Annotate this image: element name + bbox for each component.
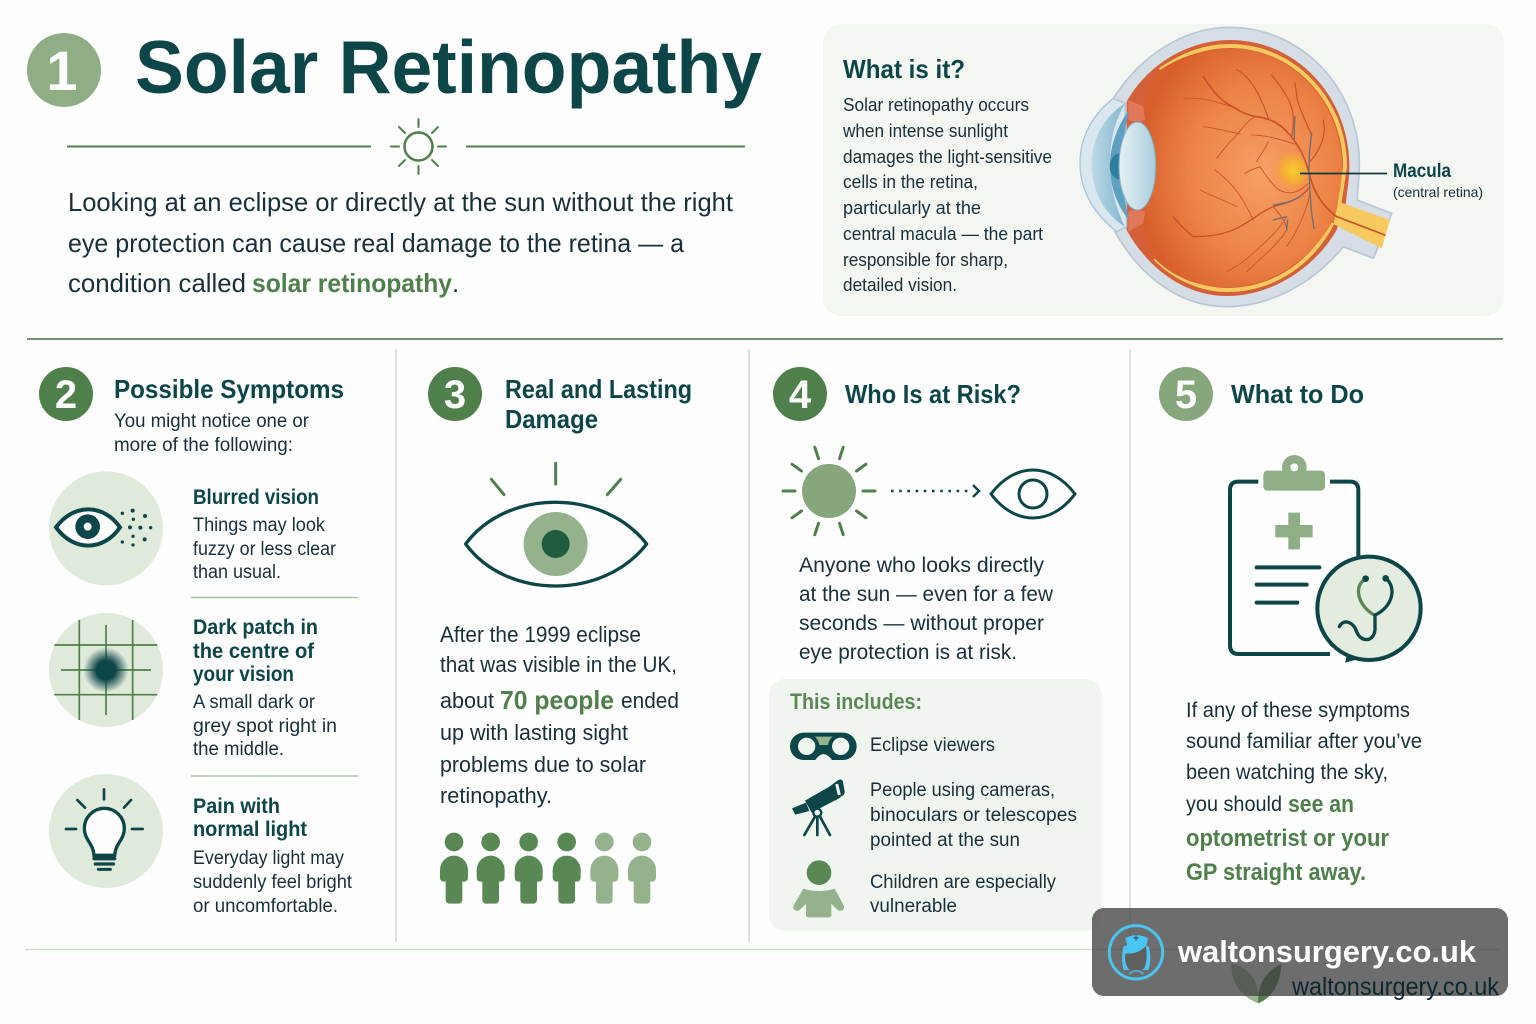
advice text: you should xyxy=(1186,792,1282,816)
number badge 2: 2 xyxy=(55,373,77,417)
risk description xyxy=(799,553,1053,664)
risk description: eye protection is at risk. xyxy=(799,640,1017,664)
section 3: real and lasting damage xyxy=(428,367,692,904)
section 2: possible symptoms xyxy=(39,367,358,917)
footer website address: waltonsurgery.co.uk xyxy=(1291,973,1499,1001)
symptom: dark patch xyxy=(193,616,337,760)
introduction text: eye protection can cause real damage to the retina — a xyxy=(68,228,685,258)
icon: clipboard and stethoscope xyxy=(1230,455,1421,663)
section heading: Damage xyxy=(505,404,598,434)
damage statistic text: ended xyxy=(621,688,679,713)
number badge 5: 5 xyxy=(1175,373,1197,417)
list item: cameras and telescopes: binoculars or telescopes xyxy=(870,805,1077,826)
symptom: pain with normal light: Pain with xyxy=(193,795,280,818)
introduction text: solar retinopathy xyxy=(252,268,453,298)
advice text: sound familiar after you’ve xyxy=(1186,729,1422,753)
macula label xyxy=(1300,161,1483,200)
symptom: pain with normal light: normal light xyxy=(193,818,307,841)
damage statistic text xyxy=(440,622,679,808)
panel body text: cells in the retina, xyxy=(843,171,978,192)
list item: children: Children are especially xyxy=(870,872,1056,893)
number badge 4: 4 xyxy=(789,373,812,417)
section intro xyxy=(114,411,310,456)
advice text: GP straight away. xyxy=(1186,859,1366,886)
section 4: who is at risk xyxy=(769,367,1102,931)
icon: eye outline xyxy=(991,470,1075,518)
panel body text: central macula — the part xyxy=(843,223,1043,244)
damage statistic text: problems due to solar xyxy=(440,752,646,777)
advice text: been watching the sky, xyxy=(1186,760,1388,784)
number badge 1: 1 xyxy=(46,39,78,102)
panel heading: This includes: xyxy=(790,689,922,714)
damage statistic text: up with lasting sight xyxy=(440,720,628,745)
icon: dark patch on grid xyxy=(49,613,163,727)
advice text xyxy=(1186,698,1422,886)
introduction text: Looking at an eclipse or directly at the sun without the right xyxy=(68,187,734,217)
number badge 2 xyxy=(39,367,93,421)
macula label: Macula xyxy=(1393,161,1451,182)
panel body text: particularly at the xyxy=(843,197,981,218)
watermark text: waltonsurgery.co.uk xyxy=(1177,934,1477,969)
section heading: Who Is at Risk? xyxy=(845,379,1021,409)
panel body text: responsible for sharp, xyxy=(843,249,1008,270)
icon: blurred eye xyxy=(49,471,163,585)
symptom: blurred vision: Blurred vision xyxy=(193,486,319,509)
list item: cameras and telescopes: pointed at the sun xyxy=(870,830,1020,851)
symptom: blurred vision: fuzzy or less clear xyxy=(193,539,337,560)
panel body text: damages the light-sensitive xyxy=(843,146,1052,167)
panel body text: detailed vision. xyxy=(843,274,957,295)
symptom: pain with normal light xyxy=(193,795,353,917)
panel: what is it xyxy=(823,24,1504,316)
title: Solar Retinopathy xyxy=(135,25,762,109)
damage statistic text: that was visible in the UK, xyxy=(440,652,677,677)
symptom: blurred vision xyxy=(193,486,337,583)
pictogram: six people xyxy=(440,833,656,904)
list item: cameras and telescopes: People using cameras, xyxy=(870,780,1055,801)
footer logo: leaves xyxy=(1231,963,1282,1003)
section intro: You might notice one or xyxy=(114,411,310,432)
advice text: see an xyxy=(1288,791,1354,818)
icon: telescope xyxy=(792,779,845,835)
list item: children: vulnerable xyxy=(870,896,957,917)
divider with sun icon xyxy=(67,119,745,174)
arrow: dotted sight line xyxy=(891,485,979,497)
panel body text: when intense sunlight xyxy=(842,120,1008,141)
damage statistic text: 70 people xyxy=(500,685,614,715)
symptom: dark patch: Dark patch in xyxy=(193,616,318,639)
risk description: Anyone who looks directly xyxy=(799,553,1044,577)
symptom: pain with normal light: or uncomfortable. xyxy=(193,896,338,917)
symptom: dark patch: A small dark or xyxy=(193,692,316,713)
icon: sun xyxy=(783,447,875,535)
symptom: pain with normal light: Everyday light may xyxy=(193,848,344,869)
advice text: optometrist or your xyxy=(1186,825,1389,852)
symptom: dark patch: grey spot right in xyxy=(193,716,337,737)
section heading: Real and Lasting xyxy=(505,374,692,404)
list item: children xyxy=(870,872,1056,917)
eye cross-section diagram xyxy=(1080,27,1392,307)
symptom: dark patch: your vision xyxy=(193,663,294,686)
icon: eclipse glasses xyxy=(790,733,857,760)
section heading: What to Do xyxy=(1231,379,1364,409)
number badge 1 xyxy=(27,33,101,107)
panel: this includes xyxy=(769,679,1102,931)
panel body text: Solar retinopathy occurs xyxy=(843,94,1029,115)
symptom: blurred vision: Things may look xyxy=(193,515,325,536)
symptom: dark patch: the centre of xyxy=(193,640,315,663)
damage statistic text: about xyxy=(440,688,494,713)
list item: cameras and telescopes xyxy=(870,780,1077,851)
symptom: dark patch: the middle. xyxy=(193,739,284,760)
number badge 3 xyxy=(428,367,482,421)
damage statistic text: After the 1999 eclipse xyxy=(440,622,641,647)
icon: light bulb xyxy=(49,774,163,888)
section heading xyxy=(505,374,692,434)
number badge 3: 3 xyxy=(444,373,466,417)
section heading: Possible Symptoms xyxy=(114,374,344,404)
symptom: pain with normal light: suddenly feel bright xyxy=(193,872,353,893)
number badge 5 xyxy=(1159,367,1213,421)
advice text: If any of these symptoms xyxy=(1186,698,1410,722)
introduction text: . xyxy=(452,268,459,298)
panel body text xyxy=(842,94,1052,295)
damage statistic text: retinopathy. xyxy=(440,783,552,808)
icon: nurse logo xyxy=(1109,926,1163,979)
icon: large eye with rays xyxy=(466,463,647,586)
risk description: at the sun — even for a few xyxy=(799,582,1053,606)
introduction text xyxy=(68,187,734,298)
symptom: blurred vision: than usual. xyxy=(193,562,281,583)
number badge 4 xyxy=(773,367,827,421)
section 5: what to do xyxy=(1159,367,1422,886)
introduction text: condition called xyxy=(68,268,246,298)
panel heading: What is it? xyxy=(843,54,965,84)
icon: child xyxy=(793,860,844,917)
section 1: title and introduction xyxy=(27,25,762,298)
section intro: more of the following: xyxy=(114,435,293,456)
watermark badge xyxy=(1092,908,1508,996)
list item: eclipse viewers: Eclipse viewers xyxy=(870,735,995,756)
risk description: seconds — without proper xyxy=(799,611,1044,635)
macula label: (central retina) xyxy=(1393,184,1483,200)
